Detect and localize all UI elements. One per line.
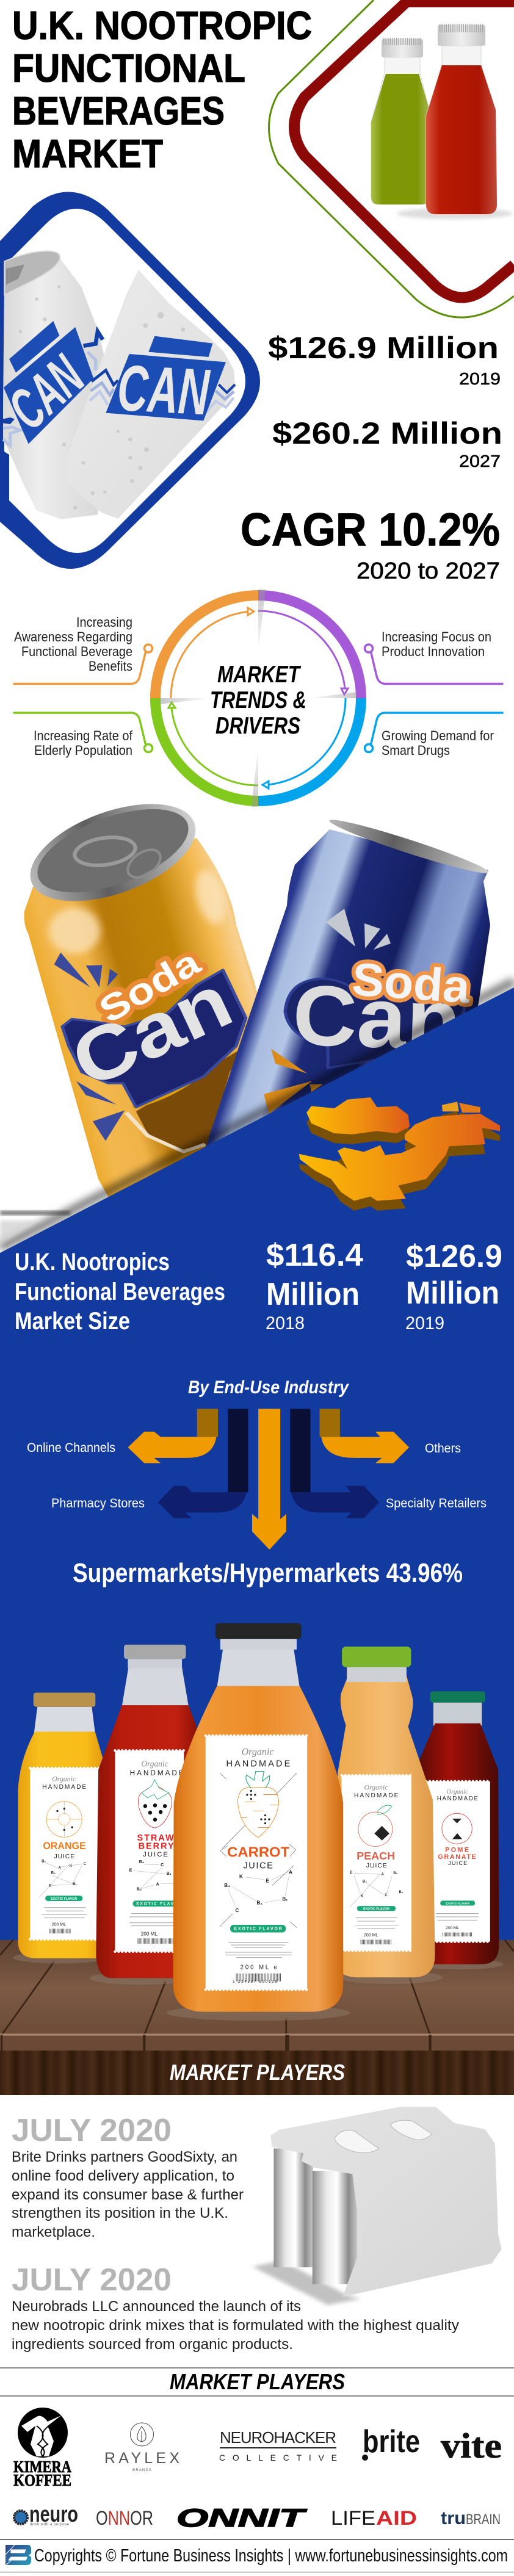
label: online channels: Online Channels (27, 1441, 115, 1455)
market size heading (15, 1249, 225, 1335)
bottle: orange juice (18, 1692, 103, 1958)
logo: vite: vite (441, 2426, 502, 2466)
driver: focus on product innovation (365, 629, 502, 684)
driver: demand for smart drugs (365, 713, 502, 758)
bottle: strawberry juice: Organic (141, 1759, 168, 1768)
driver: awareness of functional beverage benefits: Awareness Regarding (14, 629, 132, 644)
bottle: orange juice: K (70, 1864, 73, 1868)
bottle: carrot juice: B₂ (256, 1900, 262, 1905)
bottle: peach juice: B₁ (393, 1872, 398, 1875)
map: united kingdom (299, 1097, 500, 1211)
title (12, 3, 312, 176)
logo: kimera koffee: KOFFEE (13, 2471, 71, 2489)
bottle: orange juice: E (49, 1885, 51, 1888)
bottle: strawberry juice: STRAW (137, 1833, 174, 1843)
heading: by end-use industry: By End-Use Industry (188, 1377, 349, 1398)
bottle: orange juice: C (84, 1863, 87, 1866)
logo: kimera koffee: KIMERA (13, 2458, 71, 2476)
bottle: strawberry juice: B₄ (139, 1860, 144, 1864)
icon: orange soda can (18, 784, 262, 1205)
driver: awareness of functional beverage benefits: Benefits (89, 658, 132, 674)
driver: awareness of functional beverage benefits: Increasing (76, 615, 132, 630)
bottle: strawberry juice: C (161, 1863, 164, 1867)
heading: market players on wood: MARKET PLAYERS (170, 2060, 345, 2085)
driver: awareness of functional beverage benefits (14, 615, 153, 684)
bottle: strawberry juice: E (129, 1869, 132, 1873)
bottle: strawberry juice: EXOTIC FLAVOR (136, 1902, 182, 1906)
logo: raylex: RAYLEX (104, 2450, 179, 2467)
market size heading: Functional Beverages (15, 1279, 225, 1305)
bottle: orange juice: JUICE (54, 1853, 74, 1860)
logo: neurohacker collective: NEUROHACKER (220, 2428, 336, 2447)
arrows: end-use split (128, 1409, 409, 1550)
bottle: carrot juice: CARROT (227, 1844, 289, 1860)
market size stats: 2027 (459, 452, 501, 471)
stat: 2018 market size (266, 1238, 363, 1333)
driver: rate of elderly population (14, 713, 153, 758)
bottle: peach juice (338, 1647, 435, 1977)
news: brite drinks: online food delivery application, to (12, 2168, 234, 2184)
logo: raylex: BRANDS (132, 2469, 151, 2472)
news: brite drinks: JULY 2020 (12, 2113, 172, 2148)
bottle: pomegranate juice (417, 1691, 499, 1964)
market size stats: CAGR 10.2% (241, 504, 500, 556)
bottle: orange juice: HANDMADE (42, 1784, 86, 1791)
icon: orange soda can: Can (59, 958, 244, 1104)
logo: raylex (104, 2423, 179, 2472)
logo: trubrain: BRAIN (466, 2511, 501, 2528)
news: brite drinks: strengthen its position in the U.K. (12, 2205, 228, 2221)
stat: 2019 market size: $126.9 (406, 1239, 502, 1274)
bottle: peach juice: E (350, 1871, 352, 1875)
bottle: peach juice: K (361, 1894, 364, 1898)
wheel centre heading (210, 662, 306, 739)
bottle: orange juice: A (59, 1866, 62, 1870)
bottle: pomegranate juice: Organic (446, 1788, 468, 1795)
panel: dark wood band (0, 2051, 514, 2095)
driver: rate of elderly population: Elderly Population (34, 743, 132, 758)
icon: left white can (0, 251, 106, 519)
bottle: carrot juice: K (239, 1874, 243, 1880)
bottle: strawberry juice: JUICE (143, 1851, 168, 1858)
stat: 2018 market size: $116.4 (266, 1238, 363, 1273)
bottle: carrot juice: JUICE (243, 1861, 273, 1871)
title: FUNCTIONAL (12, 46, 245, 90)
logo: lifeaid: AID (376, 2507, 417, 2529)
bottle: carrot juice: A (289, 1869, 292, 1875)
news: neurobrands (12, 2262, 459, 2353)
news: neurobrands: Neurobrads LLC announced the launch of its (12, 2298, 301, 2315)
bottle: strawberry juice (96, 1645, 197, 1978)
stat: 2018 market size: 2018 (266, 1313, 305, 1333)
logo: neuro (14, 2502, 78, 2527)
icon: juice bottles (371, 25, 513, 219)
icon: blue soda can: Soda (350, 953, 472, 1013)
title: U.K. NOOTROPIC (12, 3, 312, 48)
stat: 2019 market size: Million (406, 1275, 499, 1311)
market size heading: U.K. Nootropics (15, 1249, 170, 1275)
market size heading: Market Size (15, 1308, 130, 1335)
logo: neuro: neuro (29, 2502, 78, 2527)
bottle: strawberry juice: 200 ML (141, 1931, 157, 1936)
title: BEVERAGES (12, 88, 225, 133)
bottle: orange juice: Organic (52, 1775, 76, 1783)
driver: focus on product innovation: Product Innovation (382, 644, 485, 659)
news: brite drinks (12, 2113, 244, 2240)
bottle: carrot juice (173, 1623, 343, 2012)
logo: neuro: drink with a purpose (30, 2523, 70, 2527)
bottle: carrot juice: EXOTIC FLAVOR (234, 1927, 282, 1932)
table with juice bottles (0, 1623, 514, 2051)
news: brite drinks: marketplace. (12, 2224, 95, 2240)
label: others: Others (425, 1441, 461, 1456)
market size stats: $126.9 Million (268, 331, 499, 365)
driver: demand for smart drugs: Growing Demand for (382, 728, 494, 743)
bottle: orange juice: ORANGE (43, 1841, 86, 1852)
bottle: pomegranate juice: POME (445, 1847, 469, 1854)
bottle: orange juice: B₄ (51, 1871, 56, 1875)
heading: market players: MARKET PLAYERS (170, 2369, 345, 2394)
bottle: strawberry juice: BERRY (139, 1841, 174, 1851)
logo: trubrain (441, 2508, 501, 2528)
logo: onnit: ONNIT (176, 2503, 307, 2532)
driver: demand for smart drugs: Smart Drugs (382, 743, 450, 758)
bottle: peach juice: B₄ (363, 1880, 367, 1884)
logo: brite: brite (363, 2424, 420, 2459)
bottle: carrot juice: B₁ (282, 1896, 288, 1902)
market size stats: 2019 (459, 369, 501, 388)
bottle: pomegranate juice: GRANATE (438, 1853, 476, 1861)
driver: focus on product innovation: Increasing Focus on (382, 629, 491, 644)
bottle: carrot juice: HANDMADE (226, 1759, 291, 1769)
wood table (0, 1940, 514, 2051)
logo: trubrain: tru (441, 2508, 466, 2528)
icon: blue soda can (201, 814, 491, 1160)
bottle: peach juice: HANDMADE (354, 1792, 399, 1799)
stat: 2019 market size: 2019 (405, 1313, 444, 1333)
bottle: pomegranate juice: EXOTIC FLAVOR (446, 1902, 470, 1905)
news: neurobrands: JULY 2020 (12, 2262, 172, 2298)
bottle: strawberry juice: B₁ (167, 1872, 172, 1876)
bottle: carrot juice: 1 234567 890128 (233, 1980, 277, 1984)
logo: lifeaid (331, 2507, 417, 2529)
news: neurobrands: ingredients sourced from organic products. (12, 2336, 293, 2353)
bottle: strawberry juice: A (156, 1882, 159, 1886)
blue rounded frame with white cans (0, 192, 260, 569)
icon: left white can: CAN (0, 343, 96, 442)
bottle: orange juice: B₁ (73, 1883, 77, 1886)
bottle: strawberry juice: B₂ (137, 1888, 142, 1892)
bottle: orange juice: 200 ML (52, 1923, 66, 1927)
panel: blue background (0, 987, 514, 1947)
bottle: orange juice: EXOTIC FLAVOR (51, 1897, 77, 1901)
bottle: carrot juice: Organic (242, 1747, 274, 1757)
bottle: peach juice: 200 ML (364, 1933, 378, 1938)
bottle: peach juice: EXOTIC FLAVOR (363, 1908, 389, 1911)
icon: can six-pack (252, 2107, 502, 2305)
bottle: orange juice: B₂ (42, 1860, 46, 1864)
logo: kimera koffee (13, 2408, 71, 2489)
market size stats (241, 331, 502, 584)
footer logo (5, 2545, 31, 2565)
label: pharmacy stores: Pharmacy Stores (51, 1496, 145, 1510)
logo: lifeaid: LIFE (331, 2507, 375, 2529)
wheel centre heading: DRIVERS (215, 713, 300, 739)
bottle: peach juice: PEACH (357, 1850, 395, 1862)
driver: awareness of functional beverage benefits: Functional Beverage (21, 644, 132, 659)
bottle: peach juice: A (382, 1873, 385, 1877)
bottle: pomegranate juice: HANDMADE (437, 1795, 478, 1802)
logo: neurohacker collective: COLLECTIVE (219, 2453, 337, 2462)
bottle: strawberry juice: HANDMADE (130, 1769, 184, 1777)
green and red rounded frame (269, 0, 514, 317)
logo: neurohacker collective (219, 2428, 337, 2462)
stat: 2018 market size: Million (266, 1277, 360, 1312)
stat: 2019 market size (405, 1239, 502, 1333)
bottle: carrot juice: 200 ML e (241, 1964, 277, 1971)
label: specialty retailers: Specialty Retailers (386, 1496, 487, 1510)
icon: blue soda can: Can (291, 967, 462, 1069)
bottle: pomegranate juice: JUICE (448, 1860, 467, 1866)
bottle: carrot juice: C (236, 1908, 239, 1913)
bottle: peach juice: Organic (364, 1783, 388, 1791)
news: brite drinks: Brite Drinks partners GoodSixty, an (12, 2149, 237, 2165)
news: brite drinks: expand its consumer base & further (12, 2187, 244, 2203)
icon: right white can: CAN (115, 351, 212, 429)
driver: rate of elderly population: Increasing Rate of (34, 728, 133, 743)
logo: onnor: ONNOR (96, 2507, 153, 2529)
market size stats: $260.2 Million (272, 416, 502, 450)
fold shadow (0, 981, 514, 1247)
bottle: pomegranate juice: 200 ML (446, 1926, 459, 1930)
icon: right white can (18, 270, 235, 519)
icon: orange soda can: Soda (92, 941, 207, 1031)
news: neurobrands: new nootropic drink mixes that is formulated with the highest quality (12, 2317, 459, 2334)
bottle: peach juice: JUICE (366, 1863, 387, 1869)
bottle: carrot juice: B₄ (224, 1883, 230, 1888)
bottle: peach juice: B₁ (399, 1891, 404, 1894)
wheel centre heading: TRENDS & (210, 687, 306, 713)
title: MARKET (12, 131, 163, 176)
bottle: peach juice: C (385, 1894, 388, 1897)
market trends and drivers wheel (155, 590, 361, 807)
wheel centre heading: MARKET (217, 662, 302, 688)
market size stats: 2020 to 2027 (357, 558, 500, 584)
bottle: carrot juice: E (266, 1878, 269, 1884)
